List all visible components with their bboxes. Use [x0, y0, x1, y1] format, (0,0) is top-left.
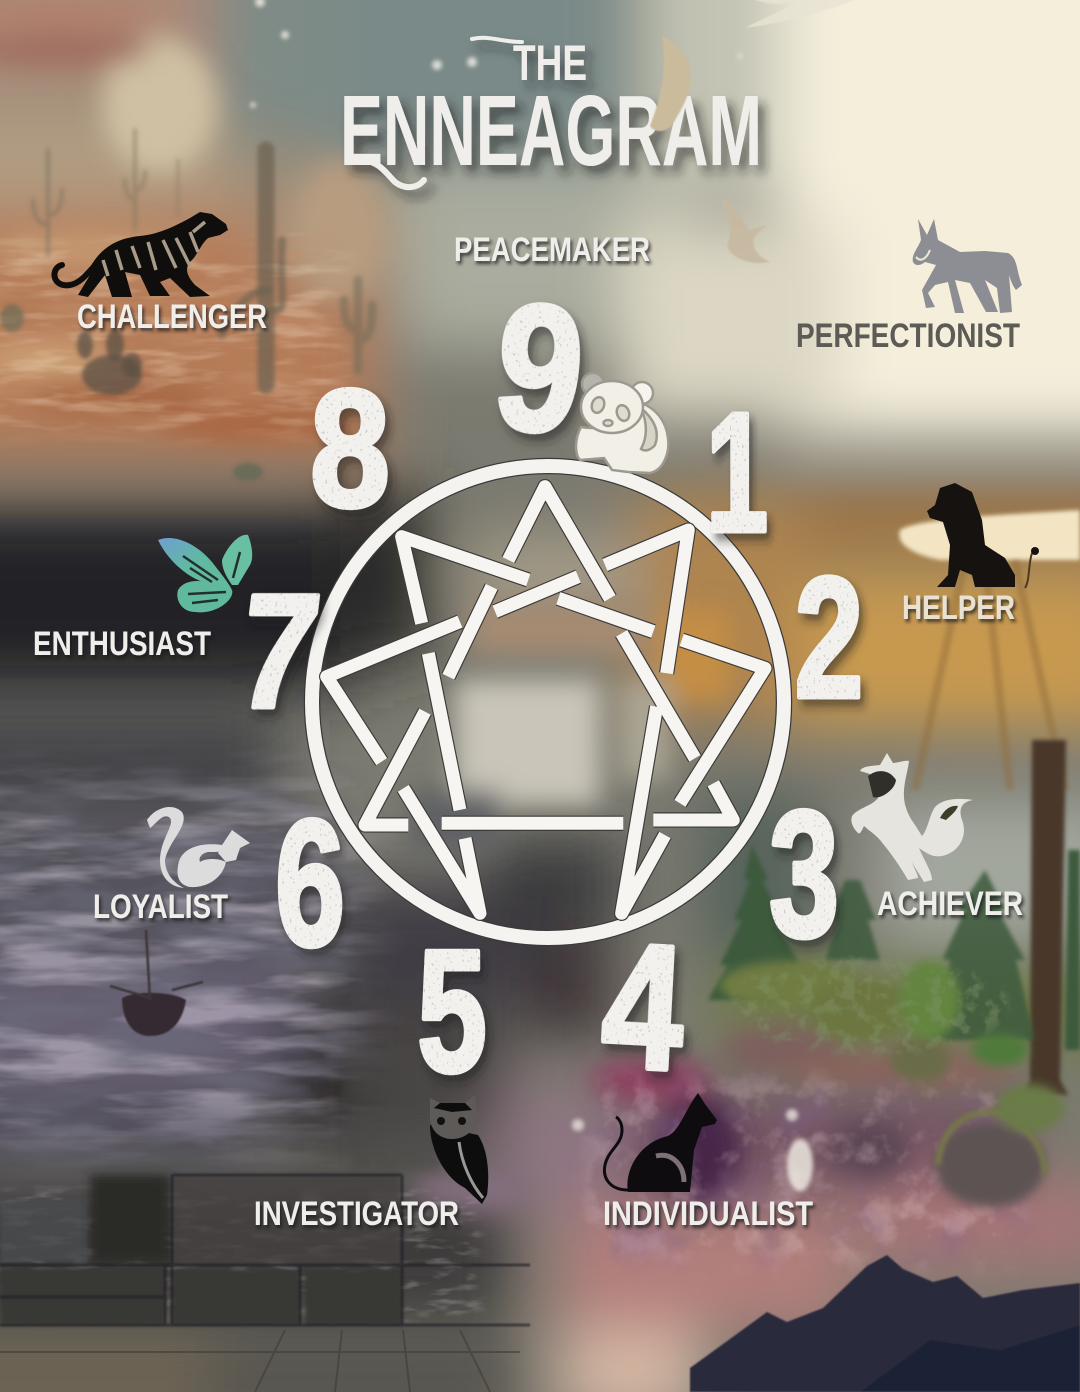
icon: tiger	[54, 212, 228, 297]
stone wall	[0, 1045, 530, 1392]
symbol star	[327, 487, 765, 913]
number 1: 1	[706, 378, 768, 568]
enneagram symbol	[312, 466, 784, 938]
label: enthusiast: ENTHUSIAST	[33, 625, 211, 663]
number 9: 9	[486, 263, 593, 473]
label: peacemaker: PEACEMAKER	[454, 231, 650, 269]
label: challenger: CHALLENGER	[77, 298, 267, 336]
cacti	[33, 130, 372, 385]
label: investigator: INVESTIGATOR	[254, 1195, 459, 1233]
number 2: 2	[795, 541, 863, 734]
mountains	[690, 1255, 1080, 1392]
icon: lion	[927, 483, 1039, 588]
symbol ring	[312, 466, 784, 938]
label: helper: HELPER	[902, 589, 1015, 627]
icon: butterfly	[158, 535, 252, 612]
number 6: 6	[275, 782, 345, 983]
soft stars	[250, 0, 813, 1191]
ship	[110, 930, 203, 1036]
forest trees and bushes	[708, 740, 1080, 1207]
number 3: 3	[769, 773, 839, 974]
title: ENNEAGRAM	[340, 75, 762, 187]
icon: squirrel	[147, 807, 250, 888]
centre blend of scenes	[410, 600, 730, 850]
lamp	[899, 510, 1080, 790]
label: perfectionist: PERFECTIONIST	[796, 317, 1020, 355]
icon: owl	[430, 1095, 488, 1204]
number 7: 7	[229, 560, 328, 741]
label: individualist: INDIVIDUALIST	[603, 1195, 813, 1233]
label: loyalist: LOYALIST	[93, 888, 228, 926]
number 8: 8	[310, 356, 390, 542]
icon: panda	[576, 373, 668, 473]
icon: donkey	[913, 219, 1022, 313]
birds: flying doves	[650, 0, 865, 263]
title: THE	[513, 35, 587, 91]
label: achiever: ACHIEVER	[877, 885, 1023, 923]
icon: fox	[851, 753, 973, 882]
number 4: 4	[597, 906, 689, 1108]
number 5: 5	[417, 915, 487, 1109]
title	[340, 35, 762, 187]
icon: cat	[604, 1093, 717, 1192]
